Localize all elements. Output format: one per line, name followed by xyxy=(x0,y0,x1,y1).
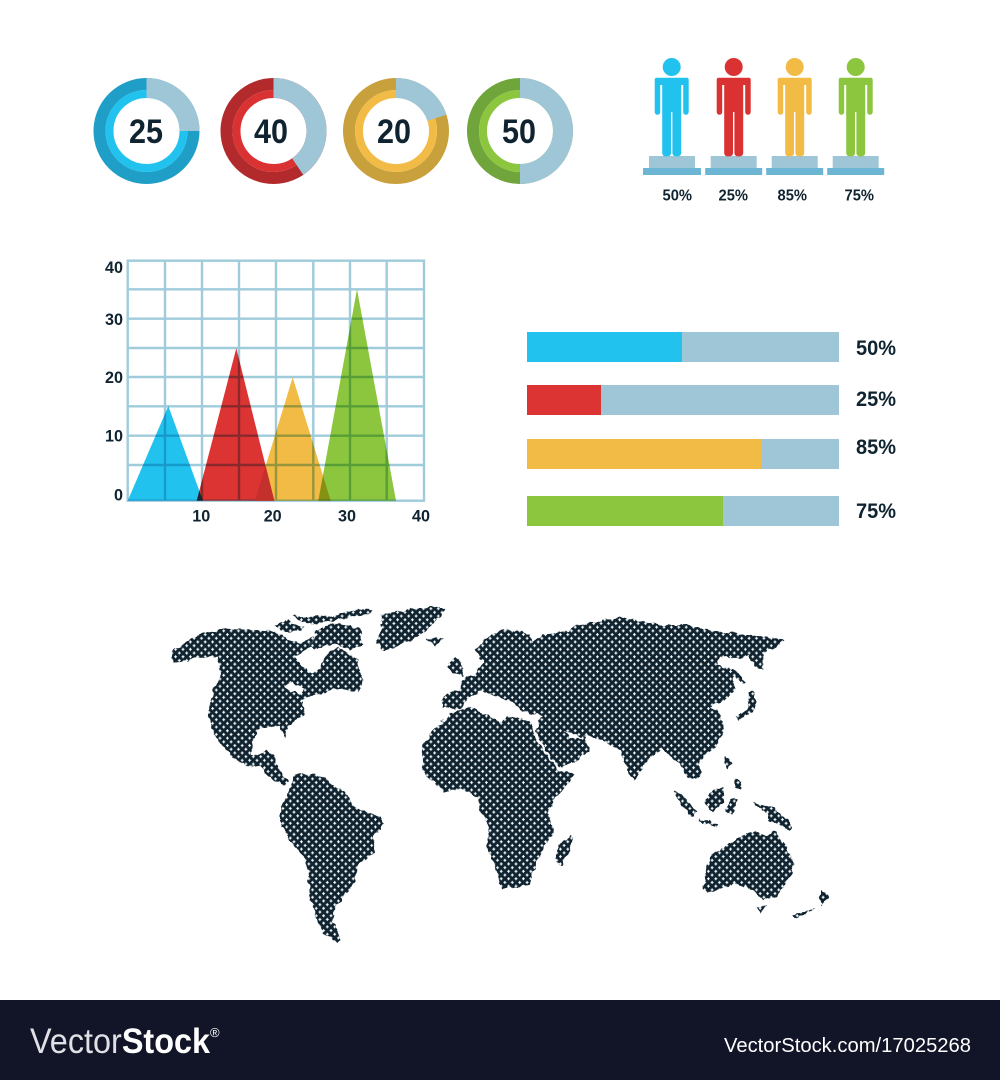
footer image id: VectorStock.com/17025268 xyxy=(724,1035,971,1057)
triangle chart: 40 xyxy=(412,507,430,526)
triangle chart: 10 xyxy=(192,507,210,526)
footer band xyxy=(0,1000,1000,1080)
triangle chart: 40 xyxy=(105,258,123,277)
progress bar: 50%: 50% xyxy=(856,337,896,360)
person percentage labels: 25% xyxy=(718,188,748,204)
triangle chart: 30 xyxy=(105,310,123,329)
triangle chart: 20 xyxy=(105,368,123,387)
triangle chart: 30 xyxy=(338,507,356,526)
person icon: yellow on podium xyxy=(766,58,823,175)
person percentage labels xyxy=(662,188,874,204)
progress bar: 85%: 85% xyxy=(856,436,896,459)
person icon: blue on podium xyxy=(643,58,701,175)
person icon: green on podium xyxy=(827,58,884,175)
progress bar: 25% xyxy=(527,385,896,415)
person percentage labels: 50% xyxy=(662,188,692,204)
footer logo: VectorStock xyxy=(30,1022,210,1061)
progress bar: 85% xyxy=(527,436,896,469)
donut chart: 40: 40 xyxy=(254,113,288,151)
triangle chart: 0 xyxy=(114,486,123,505)
donut chart: 50: 50 xyxy=(502,113,536,151)
dotted world map xyxy=(172,606,830,943)
donut chart: 25: 25 xyxy=(129,113,163,151)
donut chart: 20 xyxy=(349,84,443,178)
person percentage labels: 75% xyxy=(844,188,874,204)
progress bar: 75% xyxy=(527,496,896,526)
donut chart: 50 xyxy=(473,84,567,178)
footer logo: ® xyxy=(210,1025,220,1040)
progress bar: 25%: 25% xyxy=(856,388,896,411)
person icon: red on podium xyxy=(705,58,762,175)
progress bar: 50% xyxy=(527,332,896,362)
triangle chart: 20 xyxy=(264,507,282,526)
progress bar: 75%: 75% xyxy=(856,500,896,523)
donut chart: 40 xyxy=(226,84,320,178)
donut chart: 25 xyxy=(100,84,194,178)
donut chart: 20: 20 xyxy=(377,113,411,151)
person percentage labels: 85% xyxy=(778,188,807,204)
triangle chart xyxy=(105,258,430,526)
triangle chart: 10 xyxy=(105,427,123,446)
